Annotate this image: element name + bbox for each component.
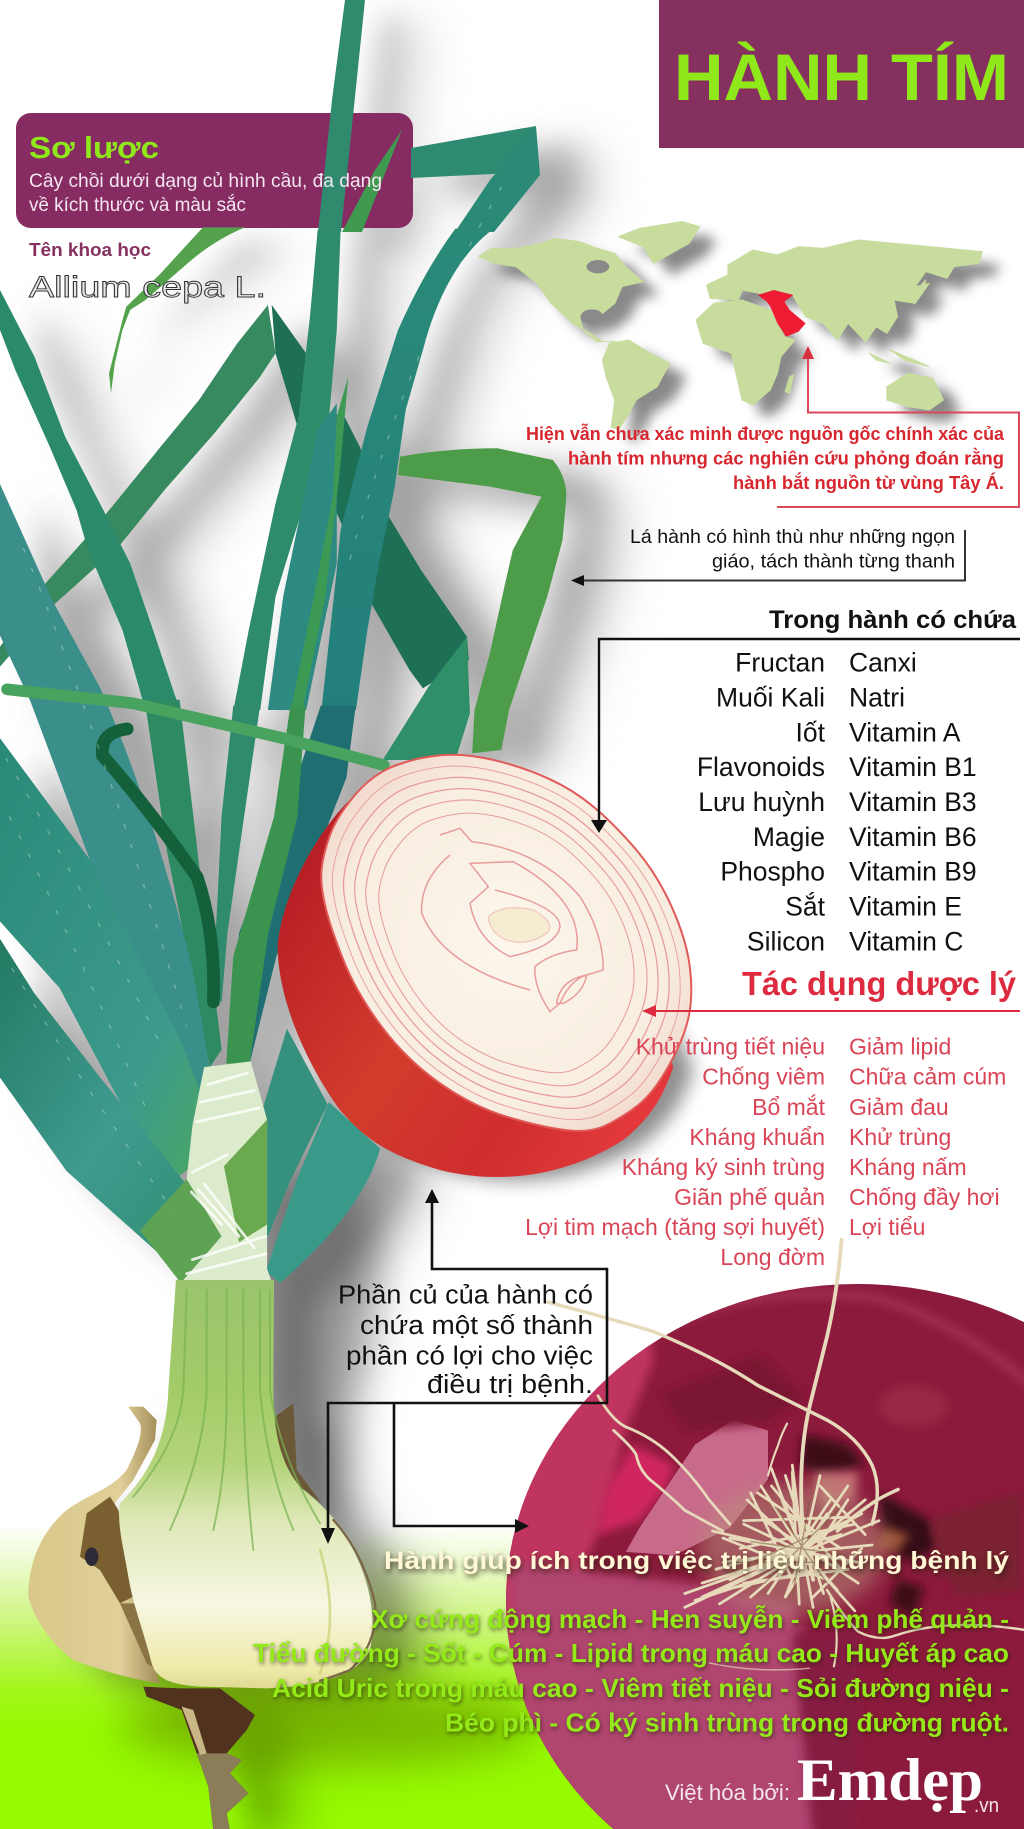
nutrients left column: Iốt xyxy=(796,718,826,748)
diseases list: Béo phì - Có ký sinh trùng trong đường ruột. xyxy=(445,1708,1009,1738)
dark regions xyxy=(799,1434,865,1476)
dark green shadow under the bulb xyxy=(120,1683,540,1767)
nutrients left column: Flavonoids xyxy=(697,752,825,782)
map shadow xyxy=(496,234,999,443)
world map xyxy=(479,222,999,443)
credit label: Việt hóa bởi: xyxy=(665,1780,790,1805)
scientific name label: Tên khoa học xyxy=(29,240,151,260)
diseases list: Xơ cứng động mạch - Hen suyễn - Viêm phế quản - xyxy=(371,1604,1009,1634)
origin callout xyxy=(526,346,1019,507)
West Asia highlight xyxy=(758,290,806,337)
red outer side of slice xyxy=(278,795,673,1177)
diseases list: Tiểu đường - Sốt - Cúm - Lipid trong máu cao - Huyết áp cao xyxy=(253,1638,1009,1668)
gray shadow beside the bulb neck xyxy=(270,1170,378,1530)
nutrients section xyxy=(591,606,1020,956)
heading: Sơ lược: Sơ lược xyxy=(29,130,159,165)
onion roots xyxy=(548,1240,1024,1670)
callout text: chứa một số thành xyxy=(360,1312,593,1340)
upper leaves xyxy=(0,227,566,760)
nutrients left column: Lưu huỳnh xyxy=(698,787,825,817)
bulb ribs xyxy=(133,1290,375,1681)
pharmacology right column: Giảm lipid xyxy=(849,1034,951,1060)
origin text: Hiện vẫn chưa xác minh được nguồn gốc chính xác của xyxy=(526,423,1005,444)
pharmacology left column: Khử trùng tiết niệu xyxy=(636,1034,825,1060)
pharmacology left column: Kháng khuẩn xyxy=(689,1124,825,1150)
lower leaves xyxy=(0,484,384,1289)
diseases list: Acid Uric trong máu cao - Viêm tiết niệu - Sỏi đường niệu - xyxy=(272,1673,1009,1703)
pharmacology right column: Chữa cảm cúm xyxy=(849,1064,1006,1090)
leaf note text: Lá hành có hình thù như những ngọn xyxy=(630,526,955,548)
nutrients right column: Vitamin B3 xyxy=(849,787,977,817)
pharmacology left column: Kháng ký sinh trùng xyxy=(622,1154,825,1180)
lower mauve flesh xyxy=(511,1562,827,1829)
leaf speckle highlights xyxy=(6,187,502,1213)
red arrow from callout to map xyxy=(777,346,1019,507)
nutrients left column: Phospho xyxy=(720,856,825,886)
origin text: hành tím nhưng các nghiên cứu phỏng đoán rằng xyxy=(568,448,1004,468)
pharmacology heading: Tác dụng dược lý xyxy=(742,965,1017,1002)
nutrients left column: Sắt xyxy=(785,892,826,922)
wide soft shadow of the plant xyxy=(60,22,626,1829)
leaf note arrow xyxy=(571,530,965,586)
nutrients left column: Magie xyxy=(753,822,825,852)
title: HÀNH TÍM xyxy=(674,40,1009,114)
credit xyxy=(665,1747,999,1817)
nutrients left column: Fructan xyxy=(735,648,825,678)
plant leaves and bulb xyxy=(0,0,566,1829)
left pink band xyxy=(506,1342,658,1772)
pharmacology section xyxy=(525,965,1020,1270)
pharmacology right column: Kháng nấm xyxy=(849,1154,967,1180)
summary body: Cây chồi dưới dạng củ hình cầu, đa dạng xyxy=(29,171,382,192)
continents xyxy=(479,222,982,430)
nutrients heading: Trong hành có chứa xyxy=(769,606,1017,634)
mottled rosy patches xyxy=(879,1385,948,1427)
diseases section xyxy=(253,1547,1009,1738)
leaf note text: giáo, tách thành từng thanh xyxy=(712,550,955,572)
scientific name: Allium cepa L. xyxy=(29,271,266,304)
pharmacology right column: Chống đầy hơi xyxy=(849,1184,1000,1210)
callout connector to slice, bulb and onion xyxy=(321,1189,607,1544)
nutrients right column: Natri xyxy=(849,682,905,712)
nutrients right column: Vitamin B6 xyxy=(849,822,977,852)
tuft base glow xyxy=(699,1482,886,1614)
pharmacology right column: Giảm đau xyxy=(849,1094,949,1120)
big red onion xyxy=(494,1270,1024,1829)
nutrients right column: Vitamin B9 xyxy=(849,856,977,886)
nutrients right column: Vitamin C xyxy=(849,926,963,956)
pale skin patch xyxy=(626,1420,768,1555)
summary texts xyxy=(29,130,382,304)
nutrients right column: Vitamin E xyxy=(849,892,962,922)
nutrients left column: Muối Kali xyxy=(716,682,825,712)
pharmacology arrow xyxy=(642,1005,1020,1017)
leaf note xyxy=(571,526,965,586)
highlighted rim xyxy=(654,1294,1024,1389)
summary body: về kích thước và màu sắc xyxy=(29,194,246,216)
nutrients right column: Vitamin B1 xyxy=(849,752,977,782)
Great Lakes and Gulf gaps xyxy=(581,260,609,324)
origin text: hành bắt nguồn từ vùng Tây Á. xyxy=(733,472,1004,493)
pharmacology left column: Lợi tim mạch (tăng sợi huyết) xyxy=(525,1214,825,1240)
pharmacology left column: Long đờm xyxy=(720,1244,825,1270)
nutrients left column: Silicon xyxy=(747,926,825,956)
top of folded leaf (real pixels) xyxy=(411,126,536,178)
callout text: phần có lợi cho việc xyxy=(346,1342,593,1370)
onion slice xyxy=(278,755,691,1177)
pharmacology left column: Chống viêm xyxy=(702,1064,825,1090)
nutrients right column: Canxi xyxy=(849,648,917,678)
white flesh of slice xyxy=(321,755,691,1131)
pharmacology right column: Khử trùng xyxy=(849,1124,951,1150)
callout text: Phần củ của hành có xyxy=(338,1282,593,1310)
panel: summary background xyxy=(16,113,413,228)
pharmacology left column: Giãn phế quản xyxy=(674,1184,825,1210)
pink growth rings xyxy=(332,766,680,1120)
pharmacology right column: Lợi tiểu xyxy=(849,1214,925,1240)
title panel xyxy=(659,0,1024,148)
braid strands at the leaf base xyxy=(187,1073,266,1274)
nutrients right column: Vitamin A xyxy=(849,718,961,748)
callout text: điều trị bệnh. xyxy=(427,1371,593,1399)
pharmacology left column: Bổ mắt xyxy=(752,1094,826,1120)
gray cast shadow of the onion slice xyxy=(298,798,693,1180)
logo suffix: .vn xyxy=(974,1795,999,1817)
top part of tall leaves (real pixels) xyxy=(318,0,365,232)
nutrients arrow xyxy=(591,639,1020,833)
diseases heading: Hành giúp ích trong việc trị liệu những bệnh lý xyxy=(384,1547,1009,1575)
bulb xyxy=(28,1280,373,1829)
logo: Emdẹp xyxy=(797,1747,983,1813)
gray cast shadow of the plant xyxy=(38,18,604,1829)
bulb callout xyxy=(321,1189,607,1544)
